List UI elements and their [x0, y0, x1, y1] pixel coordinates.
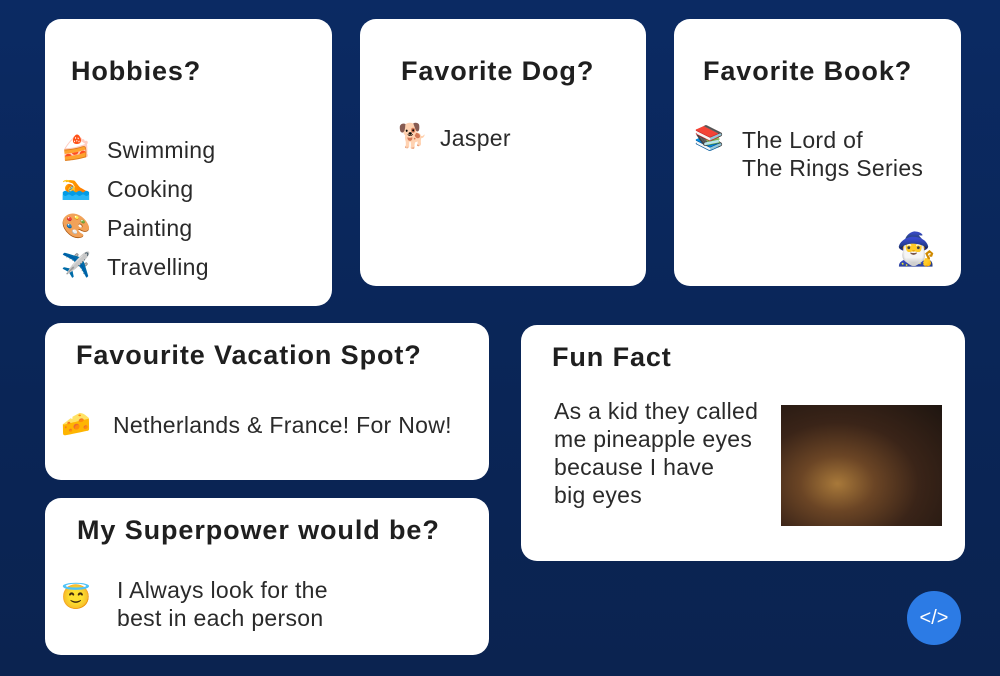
list: hobbies	[61, 134, 215, 280]
heading: superpower: My Superpower would be?	[77, 515, 440, 545]
text: fun fact	[554, 398, 758, 508]
panel: favorite book	[674, 19, 961, 286]
image: pineapple photo	[781, 405, 942, 526]
text: book: The Rings Series	[742, 155, 923, 181]
text: jasper: Jasper	[440, 125, 511, 151]
panel: fun fact	[521, 325, 965, 561]
text: superpower: 😇	[61, 584, 91, 611]
text: book: The Lord of	[742, 127, 863, 153]
list: hobbies: 🎨	[61, 213, 91, 240]
list: hobbies: Travelling	[107, 254, 209, 280]
panel: vacation	[45, 323, 489, 480]
text: superpower	[61, 577, 328, 631]
button: code icon	[907, 591, 961, 645]
list: hobbies: 🏊	[61, 174, 91, 201]
text: vacation: Netherlands & France! For Now!	[113, 412, 452, 438]
text: fun fact: because I have	[554, 454, 714, 480]
text: fun fact: As a kid they called	[554, 398, 758, 424]
list: hobbies: Painting	[107, 215, 193, 241]
panel: hobbies	[45, 19, 332, 306]
text: superpower: I Always look for the	[117, 577, 328, 603]
text: book	[694, 125, 923, 181]
panel: superpower	[45, 498, 489, 655]
heading: favorite book: Favorite Book?	[703, 56, 912, 86]
button: code icon: </>	[920, 607, 948, 629]
heading: hobbies: Hobbies?	[71, 56, 201, 86]
text: superpower: best in each person	[117, 605, 323, 631]
text: jasper	[398, 122, 511, 151]
heading: favorite dog: Favorite Dog?	[401, 56, 594, 86]
text: vacation: 🧀	[61, 411, 91, 438]
panel: favorite dog	[360, 19, 646, 286]
text: jasper: 🐕	[398, 123, 428, 150]
text: fun fact: me pineapple eyes	[554, 426, 752, 452]
list: hobbies: 🍰	[61, 135, 91, 162]
icon: wizard: 🧙‍♂️	[896, 231, 936, 267]
heading: fun fact: Fun Fact	[552, 342, 672, 372]
heading: vacation: Favourite Vacation Spot?	[76, 340, 422, 370]
list: hobbies: Swimming	[107, 137, 215, 163]
list: hobbies: ✈️	[61, 252, 91, 279]
text: book: 📚	[694, 125, 724, 152]
text: fun fact: big eyes	[554, 482, 642, 508]
list: hobbies: Cooking	[107, 176, 194, 202]
